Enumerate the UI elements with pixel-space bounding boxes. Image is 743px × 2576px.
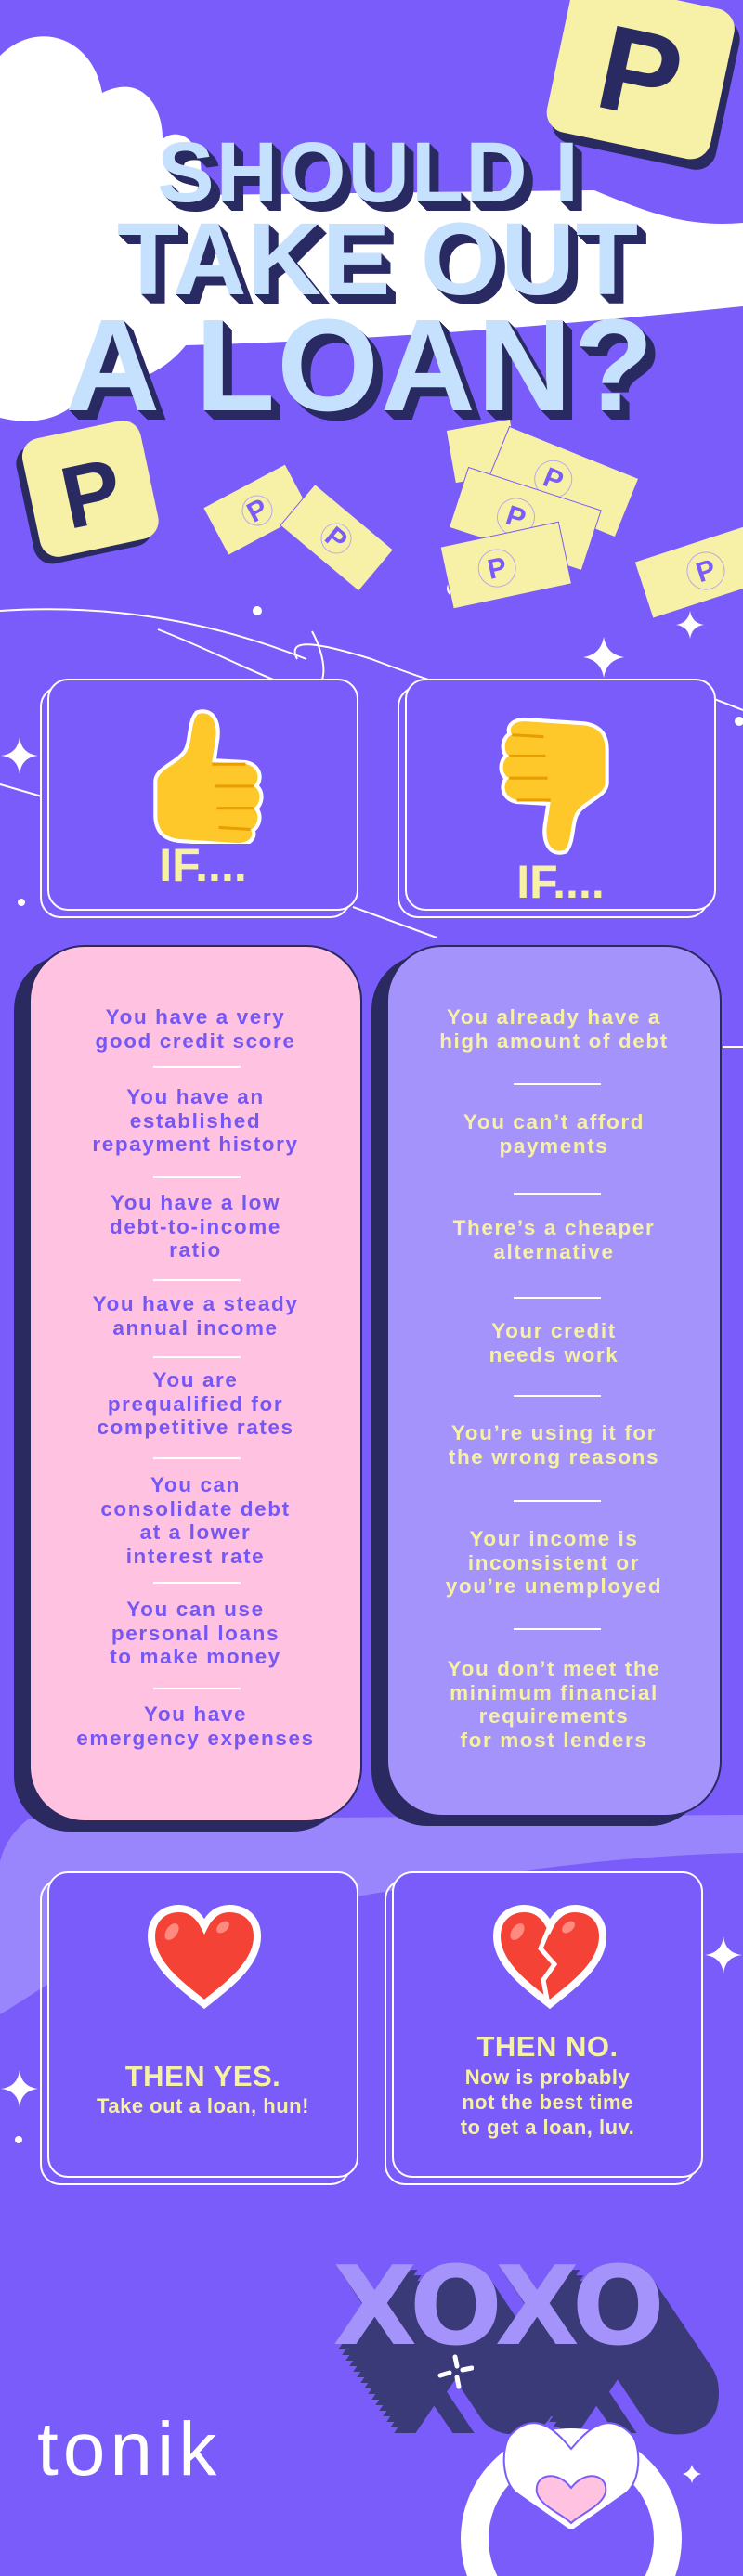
text: You don’t meet the [448, 1657, 660, 1680]
text: prequalified for [108, 1392, 283, 1416]
text: then no: THEN NO. [476, 2030, 619, 2063]
list: yes reasons [76, 1005, 315, 1750]
text: payments [500, 1134, 608, 1158]
text: to make money [110, 1645, 281, 1668]
text: at a lower [140, 1521, 251, 1544]
icon: broken heart [493, 1905, 606, 2009]
coin: top right: P [587, 0, 694, 148]
list: no reasons [439, 1005, 669, 1752]
xoxo with extruded shadow [332, 2242, 719, 2434]
text: inconsistent or [468, 1551, 640, 1574]
text: ratio [169, 1238, 222, 1262]
title: A LOAN? [65, 291, 656, 438]
text: You have [144, 1702, 247, 1726]
text: You have a steady [93, 1292, 298, 1315]
text: needs work [489, 1343, 619, 1366]
text: then yes: THEN YES. [125, 2060, 280, 2092]
text: repayment history [92, 1133, 299, 1156]
money bills [204, 420, 743, 618]
text: established [130, 1109, 261, 1133]
money bills: P [242, 493, 273, 529]
money bills: P [485, 551, 510, 586]
panel: yes reasons (pink) [14, 945, 362, 1832]
panel: then no: Now is probably [465, 2065, 630, 2089]
text: You have an [126, 1085, 265, 1108]
text: good credit score [95, 1029, 295, 1053]
xoxo with extruded shadow: XOXO [332, 2242, 661, 2370]
icon: heart [148, 1905, 261, 2009]
money bills: P [502, 500, 529, 535]
panel: no reasons (purple) [372, 945, 722, 1826]
logo: tonik: tonik [37, 2407, 221, 2492]
panel: thumbs down IF [398, 679, 716, 918]
icon: thumbs up [153, 709, 264, 844]
text: alternative [493, 1240, 615, 1263]
text: emergency expenses [76, 1727, 315, 1750]
text: Your income is [469, 1527, 639, 1550]
icon: heart hands ring [461, 2422, 682, 2576]
text: for most lenders [461, 1728, 647, 1752]
text: You have a very [106, 1005, 285, 1029]
coin: left: P [53, 440, 131, 549]
coin: left [16, 421, 159, 564]
text: the wrong reasons [449, 1445, 659, 1469]
xoxo with extruded shadow: XOXO [332, 2242, 661, 2370]
icon: thumbs down [499, 718, 609, 855]
label: IF....: IF.... [159, 839, 247, 891]
text: You are [152, 1368, 239, 1392]
text: You have a low [111, 1191, 280, 1214]
text: high amount of debt [439, 1029, 669, 1053]
panel: thumbs up IF [40, 679, 358, 918]
text: annual income [112, 1316, 279, 1340]
panel: then no: not the best time [462, 2091, 633, 2114]
text: Your credit [491, 1319, 617, 1342]
text: consolidate debt [100, 1497, 291, 1521]
text: debt-to-income [110, 1215, 281, 1238]
money bills: P [539, 462, 567, 498]
text: You already have a [447, 1005, 661, 1029]
panel: then no [385, 1871, 703, 2185]
title: SHOULD I [157, 125, 580, 220]
money bills: P [319, 521, 353, 556]
text: requirements [479, 1704, 629, 1728]
text: You can’t afford [463, 1110, 645, 1133]
text: minimum financial [450, 1681, 658, 1704]
panel: then yes: Take out a loan, hun! [97, 2094, 309, 2117]
title [65, 125, 656, 438]
coin: top right [546, 0, 740, 170]
sparkle small cross [438, 2354, 474, 2389]
text: personal loans [111, 1622, 280, 1645]
text: You can [150, 1473, 241, 1496]
money bills: P [693, 554, 720, 589]
text: There’s a cheaper [453, 1216, 655, 1239]
panel: then no: to get a loan, luv. [461, 2116, 634, 2139]
text: You can use [126, 1598, 265, 1621]
label: IF....: IF.... [516, 856, 605, 908]
text: You’re using it for [451, 1421, 657, 1444]
text: competitive rates [97, 1416, 294, 1439]
text: interest rate [126, 1545, 265, 1568]
title: TAKE OUT [117, 202, 639, 317]
text: you’re unemployed [446, 1574, 662, 1598]
panel: then yes [40, 1871, 358, 2185]
